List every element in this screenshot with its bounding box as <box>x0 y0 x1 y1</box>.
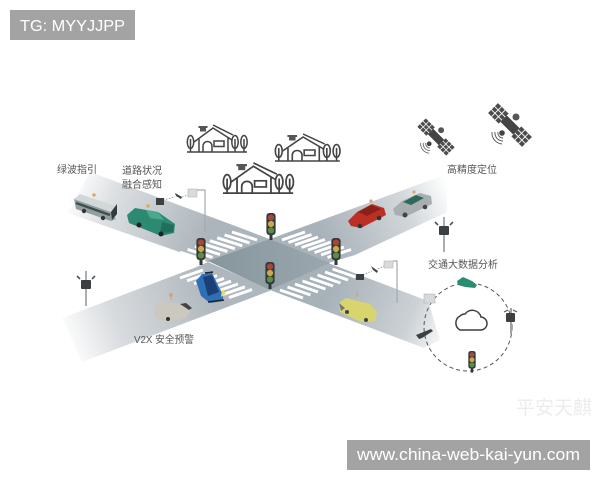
badge: website <box>347 440 590 470</box>
road: north-west arm <box>68 172 272 262</box>
icon: camera <box>416 329 433 339</box>
roadside sensor: left pole <box>77 271 95 306</box>
icon: house top right <box>275 134 340 161</box>
roadside sensor: upper right pole <box>435 217 453 252</box>
road: south-west arm <box>62 262 272 362</box>
intersection centre <box>208 239 330 290</box>
label: traffic big data analysis: 交通大数据分析 <box>428 258 498 271</box>
vehicle: green pickup <box>127 204 175 236</box>
icon: mini traffic light <box>468 351 476 373</box>
crosswalk: north-west <box>180 232 257 260</box>
camera pole: north-west <box>156 189 205 232</box>
data analysis circle <box>416 277 517 373</box>
vehicle: bus <box>74 193 117 221</box>
traffic light: right <box>331 238 341 265</box>
crosswalk: south-west <box>180 270 252 298</box>
badge: website: www.china-web-kai-yun.com <box>356 445 580 464</box>
traffic light: bottom <box>265 262 275 289</box>
badge: top left: TG: MYYJJPP <box>20 18 125 35</box>
icon: house centre <box>223 163 293 193</box>
icon: satellite left <box>417 118 455 156</box>
dashed ring <box>424 283 512 371</box>
label: V2X safety warning: V2X 安全预警 <box>134 333 194 346</box>
traffic light: left <box>196 238 206 265</box>
icon: roadside unit <box>504 308 517 334</box>
icon: small green car <box>457 277 477 288</box>
vehicle: white van <box>153 293 192 322</box>
crosswalk: south-east <box>280 269 356 298</box>
road: south-east arm <box>270 263 440 348</box>
vehicle: yellow van <box>339 291 377 322</box>
traffic light: top <box>266 213 276 240</box>
road: north-east arm <box>270 174 447 263</box>
label: high precision positioning: 高精度定位 <box>447 163 497 176</box>
watermark: 平安天麒 <box>516 397 592 419</box>
vehicle: blue crashed car <box>196 272 226 303</box>
label: road condition fusion sensing: 道路状况 <box>122 164 162 177</box>
camera pole: south-east <box>356 261 397 303</box>
icon: satellite right <box>488 103 532 147</box>
badge: top left <box>10 10 135 40</box>
icon: cloud <box>456 310 487 330</box>
vehicle: silver car <box>393 190 432 218</box>
crosswalk: north-east <box>282 232 351 258</box>
icon: sign box <box>424 294 435 303</box>
label: road condition fusion sensing: 融合感知 <box>122 178 162 191</box>
road network <box>62 172 447 362</box>
icon: house top left <box>187 125 247 152</box>
vehicle: red car <box>348 199 386 228</box>
label: green wave guidance: 绿波指引 <box>57 163 97 176</box>
